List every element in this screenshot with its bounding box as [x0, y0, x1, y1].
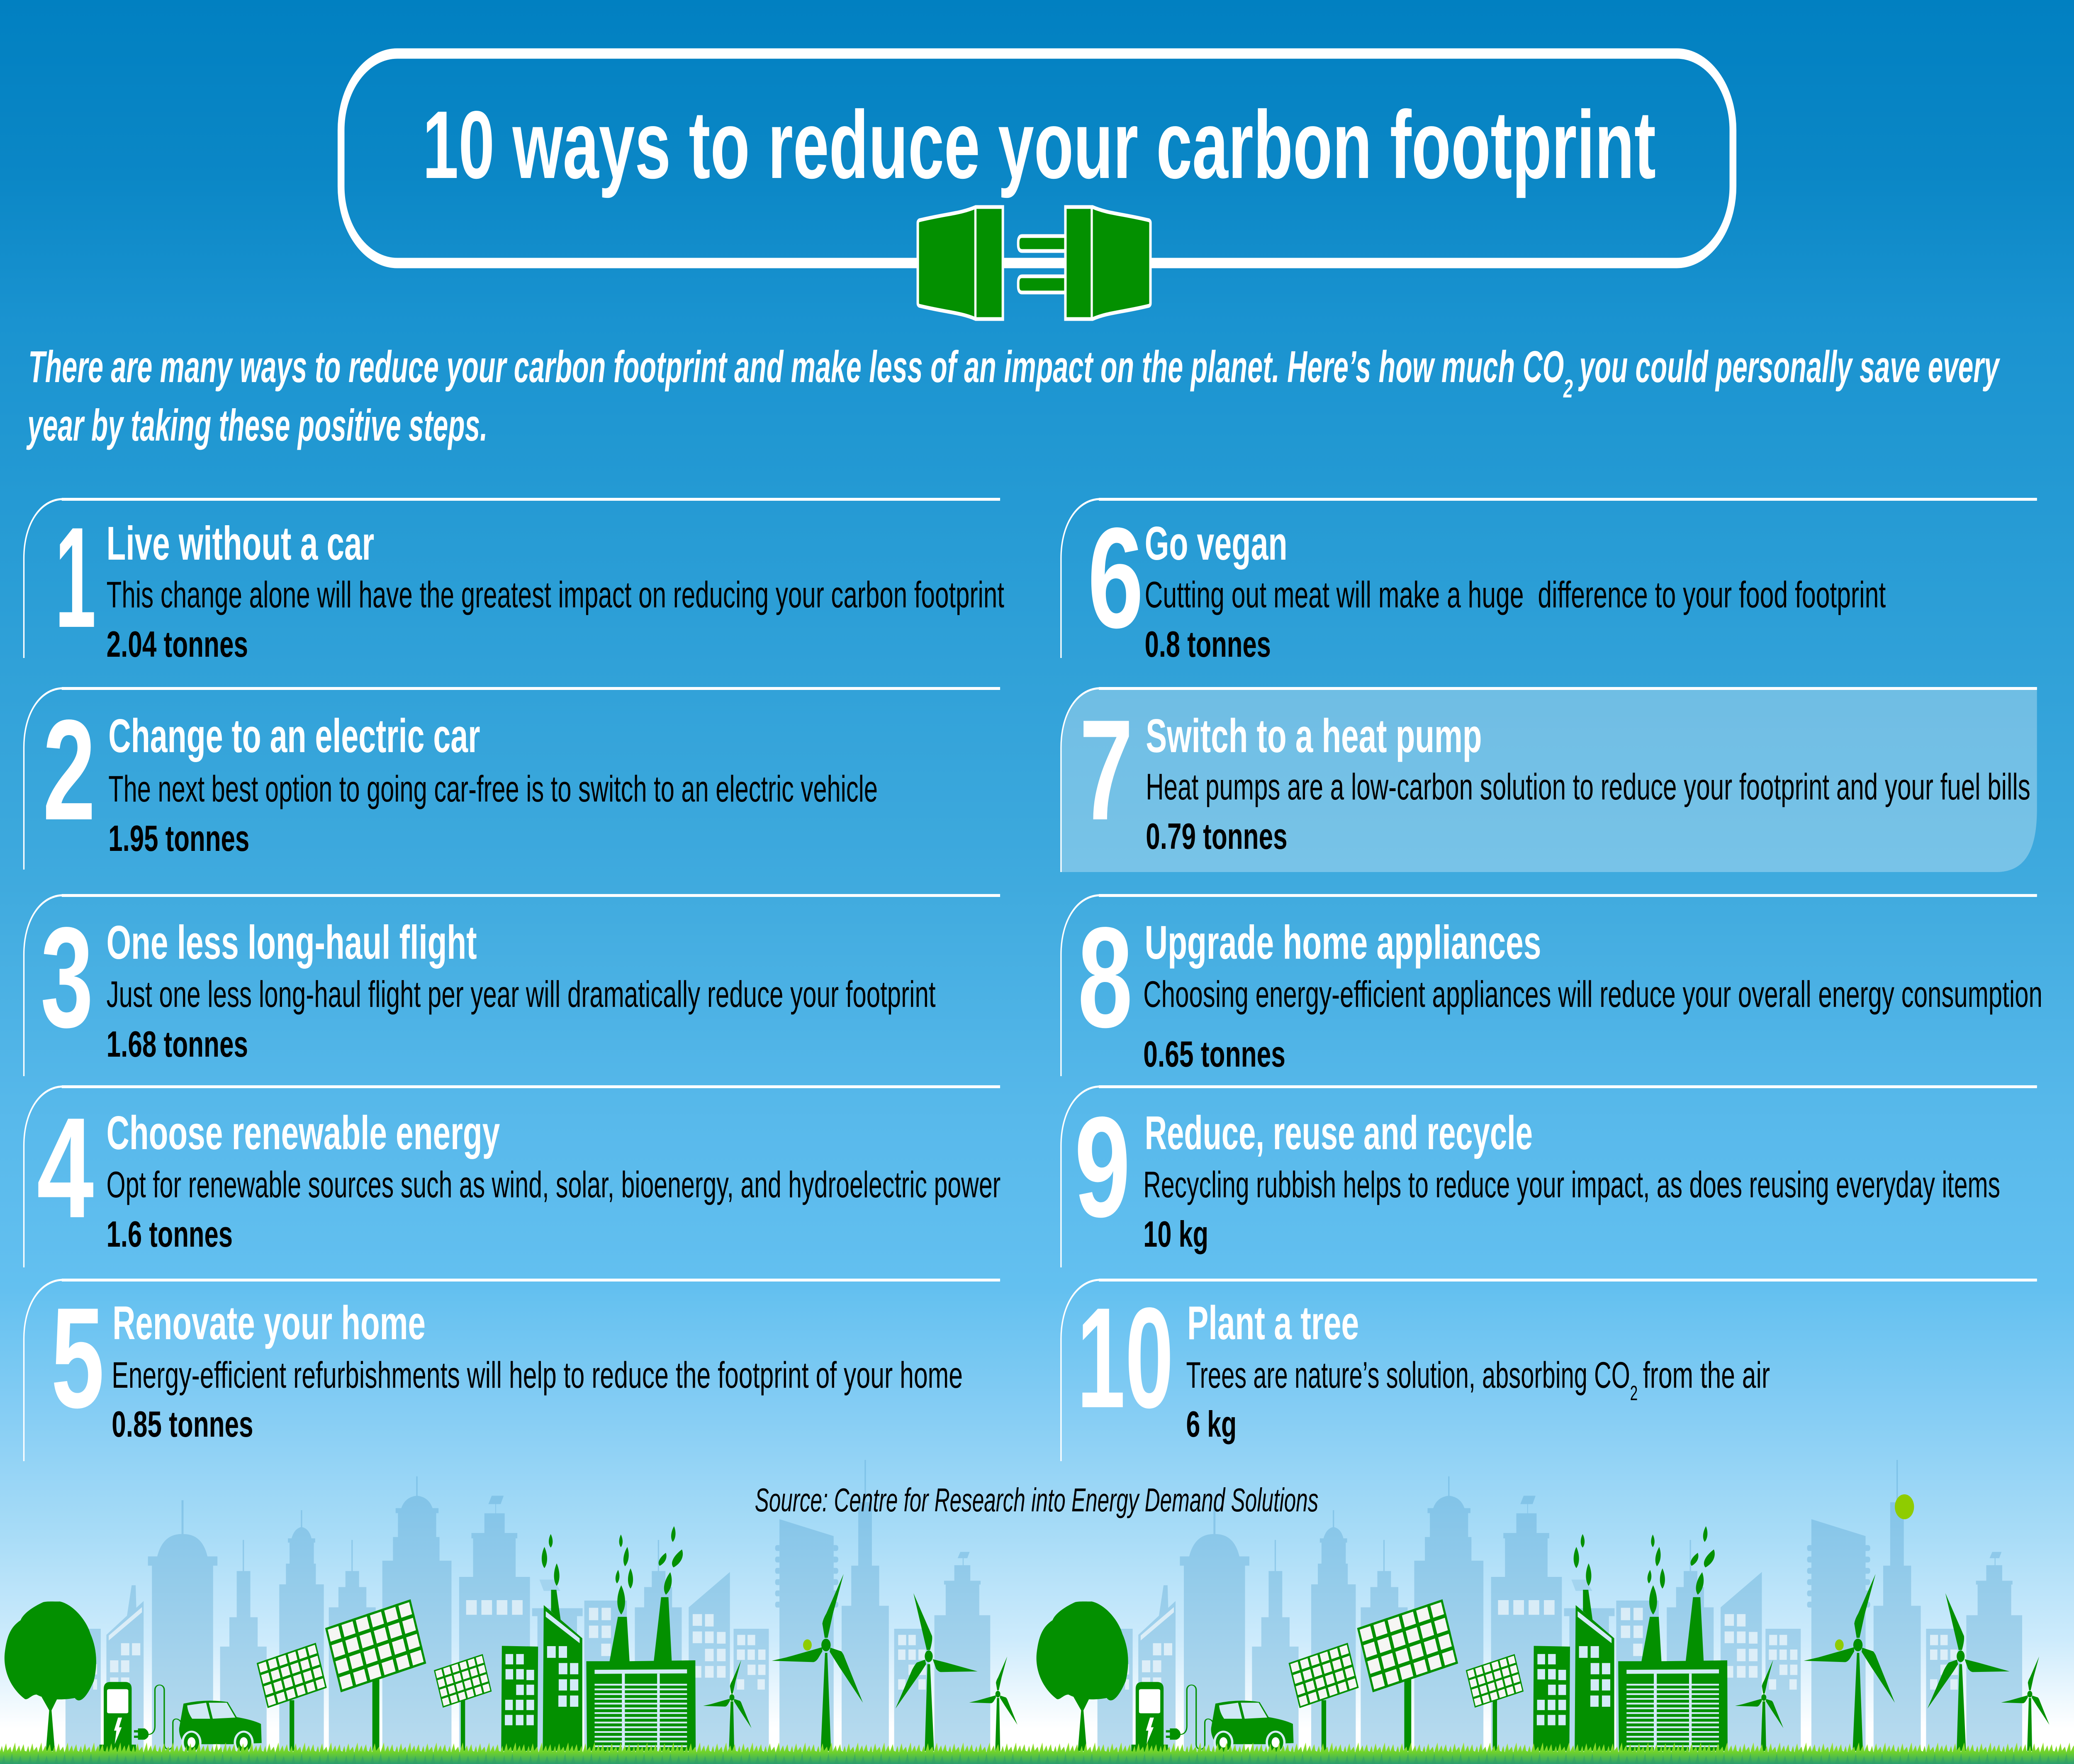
outline	[24, 895, 1000, 1076]
city scene left	[5, 1460, 1018, 1754]
panel 6	[1061, 497, 2037, 665]
value: 10 kg	[1143, 1213, 1208, 1255]
outline	[24, 1087, 1000, 1267]
outline	[1061, 895, 2037, 1076]
tall dome tower	[382, 1476, 451, 1751]
icon: large turbine	[772, 1574, 863, 1751]
needle tower	[842, 1460, 889, 1751]
outline	[1061, 1087, 2037, 1267]
top rule	[1099, 1085, 2037, 1088]
green dot	[803, 1640, 812, 1651]
dome tower small	[279, 1510, 324, 1751]
panel 5	[24, 1277, 1000, 1461]
top rule	[1099, 1279, 2037, 1282]
subscript 2: 2	[1630, 1381, 1638, 1405]
windowed building right	[894, 1629, 930, 1751]
description end: from the air	[1643, 1355, 1770, 1396]
description: Heat pumps are a low-carbon solution to reduce your footprint and your fuel bills	[1146, 766, 2030, 807]
description: Choosing energy-efficient appliances will reduce your overall energy consumption	[1143, 974, 2042, 1015]
icon: solar panel third	[434, 1654, 492, 1751]
top rule	[1099, 894, 2037, 897]
title: 10 ways to reduce your carbon footprint	[423, 91, 1656, 199]
stepped tower 2	[329, 1540, 376, 1751]
heading: Reduce, reuse and recycle	[1145, 1107, 1533, 1160]
description: The next best option to going car-free is to switch to an electric vehicle	[108, 768, 878, 809]
angled building	[106, 1585, 144, 1751]
panel 10	[1061, 1277, 2037, 1461]
t-shaped building	[532, 1608, 583, 1751]
wedge building	[689, 1572, 730, 1751]
panel 8	[1061, 894, 2042, 1076]
intro line 1: There are many ways to reduce your carbon footprint and make less of an impact on the planet. Here’s how much CO	[28, 342, 1564, 392]
icon: solar panel large	[325, 1599, 426, 1751]
top rule	[62, 1085, 1000, 1088]
small windowed building	[734, 1629, 769, 1751]
green elements part two	[501, 1526, 1018, 1751]
value: 1.6 tonnes	[107, 1213, 233, 1255]
number: 1	[55, 497, 96, 657]
description: Just one less long-haul flight per year will dramatically reduce your footprint	[107, 974, 936, 1015]
tower with mini panel	[935, 1552, 990, 1751]
value: 0.79 tonnes	[1146, 816, 1288, 857]
panel 3	[24, 894, 1000, 1076]
icon: small turbine right	[969, 1657, 1018, 1751]
sun dot	[1895, 1494, 1914, 1519]
heading: Renovate your home	[112, 1297, 426, 1350]
description: Cutting out meat will make a huge difference to your food footprint	[1145, 574, 1886, 615]
number: 9	[1074, 1087, 1130, 1247]
city scene right	[1037, 1460, 2050, 1754]
heading: One less long-haul flight	[107, 917, 477, 969]
value: 0.65 tonnes	[1143, 1033, 1285, 1074]
number: 4	[37, 1087, 95, 1247]
skyline part two	[532, 1460, 990, 1751]
number: 10	[1077, 1277, 1173, 1438]
value: 2.04 tonnes	[107, 624, 248, 665]
title pill outline	[341, 54, 1733, 263]
panel 7 highlighted	[1061, 687, 2037, 872]
stepped tower 3	[635, 1540, 682, 1751]
top rule	[1099, 498, 2037, 501]
leaves from chimneys	[542, 1526, 686, 1615]
green factory	[586, 1597, 696, 1751]
top rule	[62, 1279, 1000, 1282]
heading: Go vegan	[1145, 518, 1288, 570]
icon: electric car	[179, 1701, 262, 1754]
stepped tower	[220, 1540, 267, 1751]
plug pins	[1018, 236, 1065, 292]
number: 5	[51, 1277, 104, 1438]
description: Opt for renewable sources such as wind, solar, bioenergy, and hydroelectric power	[107, 1164, 1000, 1205]
icon: plug	[1018, 206, 1151, 320]
heading: Live without a car	[107, 518, 374, 570]
intro text	[26, 342, 2000, 451]
number: 6	[1088, 497, 1144, 658]
icon: plug socket	[918, 207, 1003, 319]
intro line 2: year by taking these positive steps.	[26, 400, 487, 451]
description: This change alone will have the greatest impact on reducing your carbon footprint	[107, 574, 1004, 615]
skyline part one	[66, 1476, 530, 1751]
top rule	[1099, 687, 2037, 690]
heading: Switch to a heat pump	[1146, 710, 1482, 763]
highlight background	[1061, 688, 2037, 872]
outline	[1061, 1280, 2037, 1461]
icon: tree	[5, 1601, 96, 1751]
heading: Upgrade home appliances	[1145, 917, 1541, 969]
panel 9	[1061, 1085, 2037, 1267]
value: 6 kg	[1186, 1403, 1237, 1445]
value: 0.8 tonnes	[1145, 624, 1271, 665]
intro line 1 end: you could personally save every	[1578, 342, 2000, 392]
icon: charging cable and plug	[134, 1685, 181, 1749]
subscript 2: 2	[1563, 375, 1573, 403]
balcony tower	[775, 1519, 838, 1751]
value: 1.68 tonnes	[107, 1023, 248, 1065]
outline	[24, 1280, 1000, 1461]
number: 8	[1078, 897, 1133, 1057]
source note: Source: Centre for Research into Energy Demand Solutions	[755, 1482, 1318, 1519]
outline	[24, 499, 1000, 658]
description: Recycling rubbish helps to reduce your impact, as does reusing everyday items	[1143, 1164, 2000, 1205]
panel 2	[24, 687, 1000, 870]
panel 4	[24, 1085, 1000, 1267]
top rule	[62, 894, 1000, 897]
divider in plug	[1091, 206, 1093, 320]
outline	[1061, 499, 2037, 658]
description: Trees are nature’s solution, absorbing CO	[1186, 1355, 1630, 1396]
value: 0.85 tonnes	[112, 1403, 253, 1445]
value: 1.95 tonnes	[108, 818, 249, 859]
icon: solar panel small	[257, 1643, 327, 1751]
divider in socket	[974, 206, 976, 320]
grass strip	[0, 1742, 2074, 1764]
number: 7	[1079, 690, 1133, 850]
green building 1	[501, 1646, 538, 1751]
green elements part one	[5, 1599, 492, 1754]
heading: Plant a tree	[1187, 1297, 1359, 1350]
tower with solar panel	[459, 1496, 530, 1751]
panel 1	[24, 497, 1004, 665]
number: 2	[43, 690, 95, 850]
green building 2 with chimney	[539, 1580, 582, 1751]
icon: small turbine	[703, 1660, 752, 1751]
description: Energy-efficient refurbishments will help to reduce the footprint of your home	[112, 1355, 963, 1396]
plug body	[1065, 207, 1151, 319]
title banner	[341, 54, 1733, 320]
icon: second large turbine	[896, 1593, 978, 1751]
number: 3	[41, 897, 93, 1057]
building behind tree	[66, 1629, 101, 1751]
heading: Change to an electric car	[108, 710, 480, 763]
office building	[584, 1601, 627, 1751]
top rule	[62, 687, 1000, 690]
top rule	[62, 498, 1000, 501]
heading: Choose renewable energy	[107, 1107, 500, 1160]
dome tower	[148, 1500, 217, 1751]
outline	[1061, 688, 2037, 872]
outline	[24, 688, 1000, 870]
icon: charging station	[100, 1682, 136, 1752]
